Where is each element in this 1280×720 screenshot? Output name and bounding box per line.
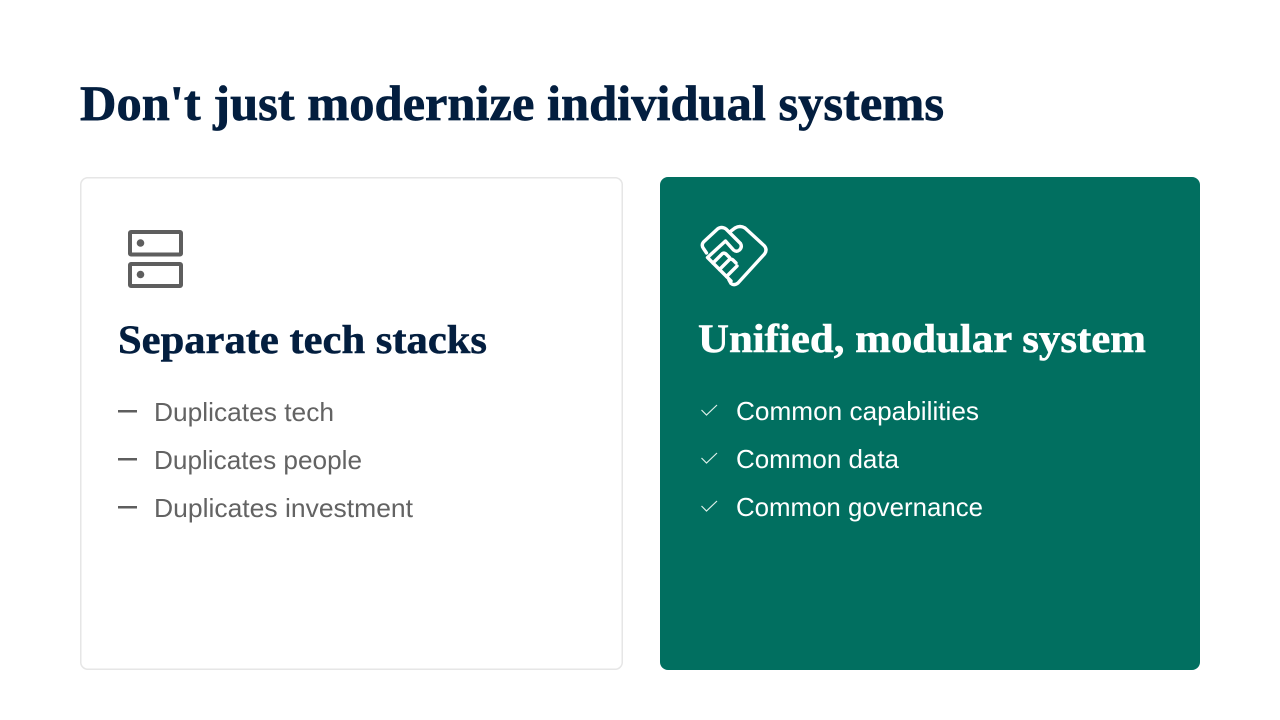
panel: separate tech stacks bbox=[81, 178, 622, 669]
panel: unified modular system bbox=[660, 177, 1200, 670]
item: duplicates tech: Duplicates tech bbox=[154, 397, 334, 427]
item: common governance: Common governance bbox=[736, 492, 983, 522]
item: duplicates people: Duplicates people bbox=[154, 445, 362, 475]
title: Don't just modernize individual systems bbox=[80, 75, 944, 131]
list: common bbox=[702, 396, 983, 522]
icon: server stacks bbox=[130, 232, 181, 286]
item: common data: Common data bbox=[736, 444, 900, 474]
list: duplicates bbox=[118, 397, 414, 523]
icon: handshake bbox=[702, 226, 766, 285]
item: common capabilities: Common capabilities bbox=[736, 396, 979, 426]
item: duplicates investment: Duplicates investment bbox=[154, 493, 414, 523]
heading: unified modular system: Unified, modular system bbox=[698, 316, 1146, 361]
heading: separate tech stacks: Separate tech stacks bbox=[118, 317, 487, 362]
